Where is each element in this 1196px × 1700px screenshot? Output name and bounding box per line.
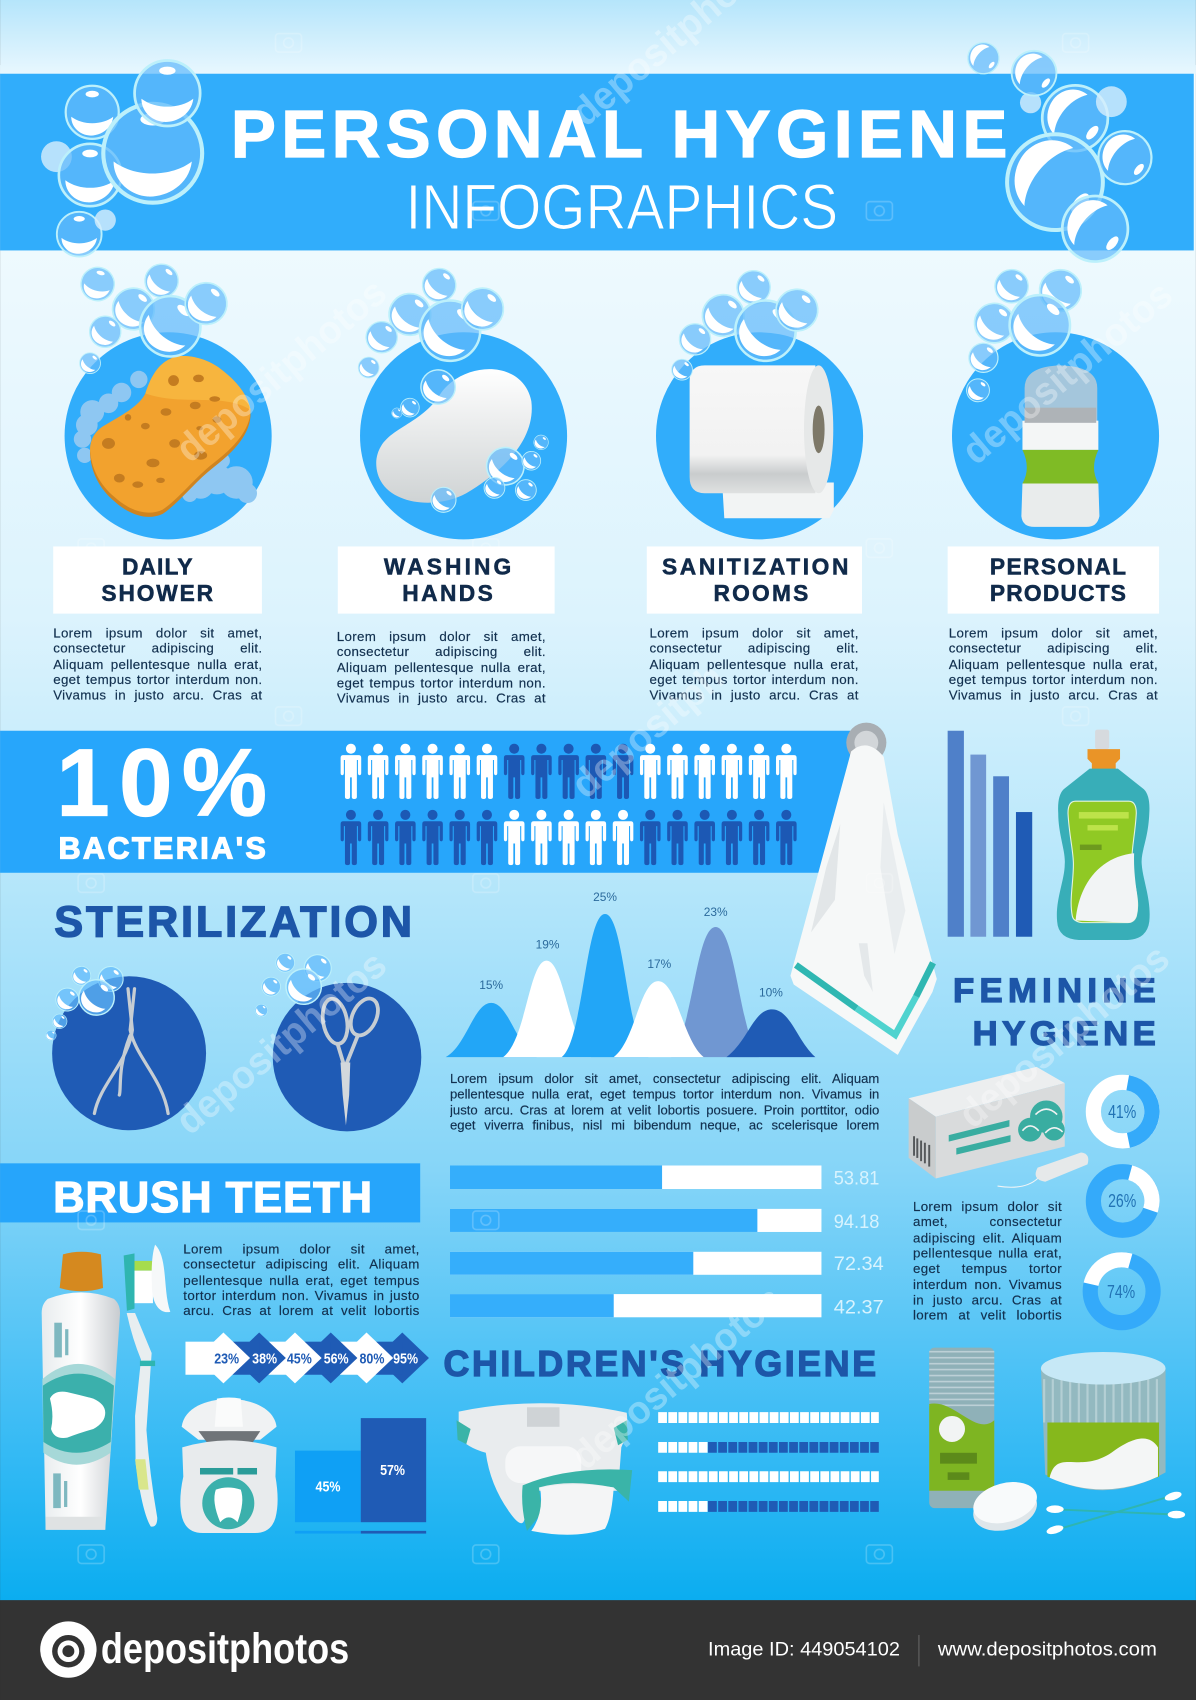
icon: personal care bottle in circle: [952, 332, 1159, 539]
bubbles: [44, 961, 128, 1043]
bar values: 94.18: [834, 1211, 879, 1233]
text: washing hands: [337, 629, 546, 709]
text: sterilization paragraph: pellentesque nulla erat, eget tempus tortor interdum non. Vivamus in: [450, 1087, 879, 1102]
icon: soap bar in circle: [360, 332, 567, 539]
banner subtitle: INFOGRAPHICS: [406, 171, 838, 243]
arrow percent strip: [185, 1332, 429, 1383]
icon: tampon box: [909, 1067, 1088, 1187]
text: sanitization rooms: Lorem ipsum dolor sit amet,: [649, 626, 859, 641]
soap bubbles above product circles: [75, 257, 1090, 406]
text: feminine paragraph: [913, 1199, 1062, 1327]
donut: 41 percent: [1089, 1078, 1157, 1146]
icon: cotton pad: [968, 1475, 1042, 1537]
icon: cotton swabs: [1046, 1490, 1185, 1536]
icon: dish soap bottle: [1057, 730, 1150, 940]
text: feminine paragraph: pellentesque nulla erat,: [913, 1246, 1062, 1261]
text: washing hands: consectetur adipiscing elit.: [337, 644, 546, 660]
watermarks: depositphotos: [951, 936, 1178, 1137]
strip labels: 23%: [214, 1350, 240, 1367]
chart labels: 19%: [536, 938, 560, 952]
text: sterilization paragraph: eget viverra finibus, nisl mi bibendum neque, ac scelerisque lorem: [450, 1118, 879, 1133]
band: brush teeth: [0, 1163, 420, 1222]
text: brush teeth paragraph: tortor interdum non. Vivamus in justo: [183, 1288, 420, 1303]
label: sanitization rooms: [647, 546, 862, 614]
text: personal products: Aliquam pellentesque nulla erat,: [949, 657, 1158, 672]
banner title: PERSONAL HYGIENE: [231, 97, 1007, 172]
text: feminine paragraph: adipiscing elit. Aliquam: [913, 1230, 1062, 1245]
text: brush teeth paragraph: arcu. Cras at lorem at velit lobortis: [183, 1304, 420, 1319]
soap bubbles: banner right: [961, 36, 1162, 275]
text: daily shower: Aliquam pellentesque nulla erat,: [53, 657, 262, 672]
tampon: [998, 1152, 1088, 1187]
label: washing hands: HANDS: [402, 580, 493, 606]
text: daily shower: Lorem ipsum dolor sit amet,: [53, 626, 262, 641]
strip labels: 45%: [287, 1350, 312, 1367]
watermarks: depositphotos: [954, 273, 1181, 473]
bar values: 42.37: [834, 1296, 884, 1318]
donut: 26 percent: [1087, 1165, 1158, 1237]
soap bubbles: banner left: [41, 60, 202, 257]
label: personal products: [948, 546, 1159, 614]
strip labels: 56%: [324, 1350, 349, 1367]
strip labels: 95%: [393, 1350, 418, 1367]
footer brand name: depositphotos: [101, 1625, 349, 1672]
text: personal products: Vivamus in justo arcu. Cras at: [949, 688, 1158, 703]
text: feminine paragraph: amet, consectetur: [913, 1215, 1062, 1230]
text: daily shower: consectetur adipiscing elit.: [53, 641, 262, 656]
label: sanitization rooms: ROOMS: [713, 580, 808, 606]
pictogram row 2: [341, 810, 797, 865]
donut: 41 percent: 41%: [1108, 1101, 1136, 1122]
heading: children's hygiene: CHILDREN'S HYGIENE: [444, 1344, 876, 1384]
big percentage: 10%: [56, 730, 267, 836]
text: sanitization rooms: eget tempus tortor interdum non.: [649, 672, 859, 687]
text: feminine paragraph: lorem at velit lobortis: [913, 1308, 1062, 1323]
label: sanitization rooms: SANITIZATION: [662, 554, 848, 580]
bar chart: 45 and 57 percent: [295, 1418, 426, 1534]
icon: nail clippers: [44, 961, 206, 1130]
strip labels: 38%: [252, 1350, 278, 1367]
text: washing hands: Lorem ipsum dolor sit amet,: [337, 629, 546, 644]
area chart: mountain peaks: [446, 890, 815, 1057]
top gradient strip: [0, 0, 1196, 74]
text: daily shower: eget tempus tortor interdum non.: [53, 672, 262, 687]
chart labels: 23%: [704, 905, 728, 919]
text: brush teeth paragraph: pellentesque nulla erat, eget tempus: [183, 1272, 420, 1288]
watermarks: depositph: [564, 656, 733, 807]
text: sterilization paragraph: [450, 1071, 879, 1136]
icon: toothpaste tube: [42, 1252, 120, 1530]
text: brush teeth paragraph: [183, 1241, 420, 1322]
banner: [0, 74, 1194, 250]
strip labels: 80%: [359, 1350, 385, 1367]
icon: scissors: [253, 949, 421, 1131]
text: feminine paragraph: in justo arcu. Cras at: [913, 1292, 1062, 1308]
footer: [0, 1600, 1196, 1700]
footer url: www.depositphotos.com: [937, 1639, 1157, 1661]
text: sanitization rooms: consectetur adipiscing elit.: [649, 641, 859, 656]
icon: sponge in circle: [65, 332, 272, 539]
bacteria label: BACTERIA'S: [59, 833, 266, 866]
watermarks: depositphotos: [564, 1278, 791, 1478]
band: brush teeth: BRUSH TEETH: [53, 1174, 372, 1222]
text: personal products: Lorem ipsum dolor sit amet,: [949, 626, 1158, 641]
footer logo: [40, 1621, 97, 1678]
text: sterilization paragraph: justo arcu. Cras at lorem at velit lobortis posuere. Proin porttitor, odio: [450, 1102, 879, 1117]
bacteria band: [0, 730, 850, 873]
chart labels: [479, 890, 783, 999]
text: brush teeth paragraph: Lorem ipsum dolor sit amet,: [183, 1241, 420, 1257]
icon: diaper: [457, 1403, 632, 1535]
label: daily shower: [53, 546, 262, 614]
text: daily shower: Vivamus in justo arcu. Cras at: [53, 688, 262, 703]
heading: sterilization: STERILIZATION: [54, 899, 412, 947]
text: feminine paragraph: interdum non. Vivamus: [913, 1277, 1062, 1292]
small camera watermarks: [78, 34, 1089, 1563]
watermarks: depositphotos: [168, 271, 395, 471]
donut: 26 percent: 26%: [1108, 1190, 1136, 1211]
text: sanitization rooms: [649, 626, 859, 706]
donut: 74 percent: 74%: [1107, 1281, 1135, 1302]
heading: feminine hygiene: FEMININE: [953, 972, 1156, 1010]
chart labels: 17%: [647, 957, 672, 971]
bar chart: top right: [948, 731, 1032, 937]
bar values: [834, 1167, 884, 1318]
bar values: 72.34: [834, 1253, 884, 1275]
label: personal products: PERSONAL: [990, 554, 1126, 580]
label: personal products: PRODUCTS: [990, 580, 1126, 606]
bar chart: 45 and 57 percent: 57%: [380, 1462, 405, 1479]
text: personal products: [949, 626, 1158, 706]
heading: feminine hygiene: [953, 972, 1156, 1053]
text: sanitization rooms: Vivamus in justo arcu. Cras at: [649, 688, 859, 703]
striped progress bars: [658, 1418, 879, 1506]
text: washing hands: Aliquam pellentesque nulla erat,: [337, 660, 546, 675]
text: brush teeth paragraph: consectetur adipiscing elit. Aliquam: [183, 1257, 420, 1272]
chart labels: 10%: [759, 985, 783, 999]
text: washing hands: eget tempus tortor interdum non.: [337, 675, 546, 691]
icon: hanging towel: [790, 723, 937, 1055]
donut: 74 percent: [1084, 1254, 1159, 1329]
bar values: 53.81: [834, 1167, 879, 1189]
text: sterilization paragraph: Lorem ipsum dolor sit amet, consectetur adipiscing elit. Aliquam: [450, 1071, 879, 1086]
label: daily shower: SHOWER: [101, 580, 213, 606]
strip labels: [214, 1350, 418, 1367]
icon: toothbrush: [124, 1245, 170, 1527]
label: daily shower: DAILY: [122, 554, 193, 580]
icon: cotton jar: [1041, 1352, 1166, 1490]
chart labels: 25%: [593, 890, 617, 904]
icon: cotton pads tube: [929, 1348, 994, 1508]
icon: toilet paper roll in circle: [656, 332, 863, 539]
text: feminine paragraph: Lorem ipsum dolor sit: [913, 1199, 1062, 1214]
label: washing hands: WASHING: [384, 554, 511, 580]
bubbles: [253, 949, 337, 1019]
text: feminine paragraph: eget tempus tortor: [913, 1261, 1062, 1276]
watermarks: depositphotos: [168, 943, 395, 1143]
pictogram row 1: [341, 744, 797, 799]
chart labels: 15%: [479, 978, 504, 992]
text: sanitization rooms: Aliquam pellentesque nulla erat,: [649, 657, 859, 672]
footer image id: Image ID: 449054102: [708, 1639, 900, 1661]
heading: feminine hygiene: HYGIENE: [973, 1015, 1156, 1053]
watermarks: [168, 0, 1181, 1478]
bar chart: 45 and 57 percent: 45%: [316, 1478, 341, 1495]
text: personal products: eget tempus tortor interdum non.: [949, 672, 1158, 687]
label: washing hands: [338, 546, 555, 614]
icon: dental floss: [180, 1398, 278, 1533]
text: personal products: consectetur adipiscing elit.: [949, 641, 1158, 656]
text: washing hands: Vivamus in justo arcu. Cras at: [337, 691, 546, 706]
horizontal bar chart: [450, 1165, 884, 1318]
text: daily shower: [53, 626, 262, 706]
